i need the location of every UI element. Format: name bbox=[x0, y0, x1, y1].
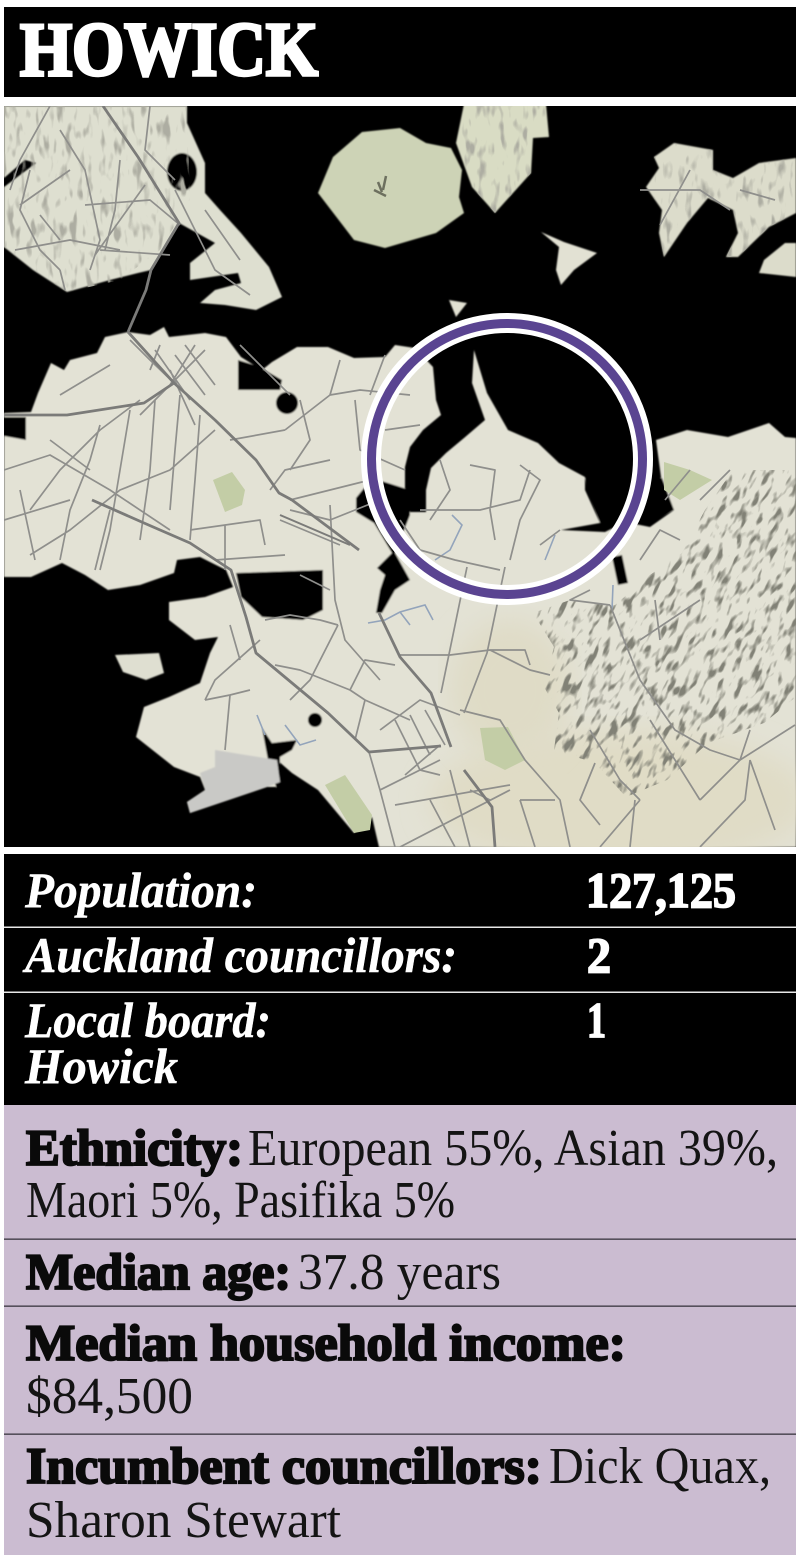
text: median household income bbox=[26, 1316, 626, 1425]
land: Rangitoto Island bbox=[318, 128, 464, 248]
warm inland tint bbox=[436, 732, 796, 847]
row: local board: 1 bbox=[587, 992, 606, 1048]
text: median age: 37.8 years bbox=[298, 1244, 501, 1301]
text: ethnicity bbox=[26, 1120, 778, 1229]
text: incumbent councillors: Dick Quax, bbox=[549, 1438, 771, 1495]
Rangitoto crater bbox=[374, 176, 386, 196]
text: median household income: $84,500 bbox=[26, 1368, 193, 1425]
minor roads bbox=[4, 106, 795, 847]
land: southern mainland bbox=[4, 327, 796, 847]
locator circle around Howick bbox=[371, 323, 643, 595]
row: Auckland councillors: 2 bbox=[587, 927, 611, 983]
hill shading bbox=[536, 470, 796, 796]
land: Browns Island bbox=[541, 232, 597, 285]
text: median household income: Median household income: bbox=[26, 1316, 626, 1372]
land: Motutapu Island bbox=[456, 104, 549, 213]
title: HOWICK: HOWICK bbox=[20, 8, 318, 92]
panel: demographics bbox=[4, 1105, 796, 1555]
row: population: Population: bbox=[24, 862, 257, 918]
water: harbours and inlets bbox=[4, 153, 674, 790]
text: incumbent councillors bbox=[26, 1438, 771, 1549]
panel: key figures bbox=[4, 854, 796, 1105]
land: north shore bbox=[4, 106, 282, 310]
land: islet bbox=[449, 300, 467, 317]
airport bbox=[187, 750, 280, 813]
text: median age bbox=[26, 1244, 501, 1301]
text: ethnicity: Maori 5%, Pasifika 5% bbox=[26, 1172, 455, 1229]
text: incumbent councillors: Sharon Stewart bbox=[26, 1492, 342, 1549]
land: eastern islet bbox=[759, 243, 796, 277]
parks bbox=[213, 462, 712, 833]
motorways bbox=[4, 106, 495, 847]
land: Puketutu Island bbox=[115, 653, 164, 680]
row: local board bbox=[24, 992, 606, 1094]
title bar bbox=[4, 7, 796, 97]
row: local board: Local board: bbox=[24, 992, 271, 1048]
text: incumbent councillors: Incumbent councillors: bbox=[26, 1439, 542, 1495]
text: median age: Median age: bbox=[26, 1245, 291, 1301]
row: population: 127,125 bbox=[586, 862, 736, 918]
row: Auckland councillors: Auckland councillors: bbox=[22, 927, 457, 983]
rivers bbox=[257, 515, 613, 745]
row: local board: Howick bbox=[24, 1038, 178, 1094]
row: population bbox=[24, 862, 736, 918]
map of Auckland with Howick circled bbox=[4, 106, 796, 847]
land: Waiheke Island bbox=[646, 143, 796, 257]
text: ethnicity: Ethnicity: bbox=[26, 1121, 243, 1177]
